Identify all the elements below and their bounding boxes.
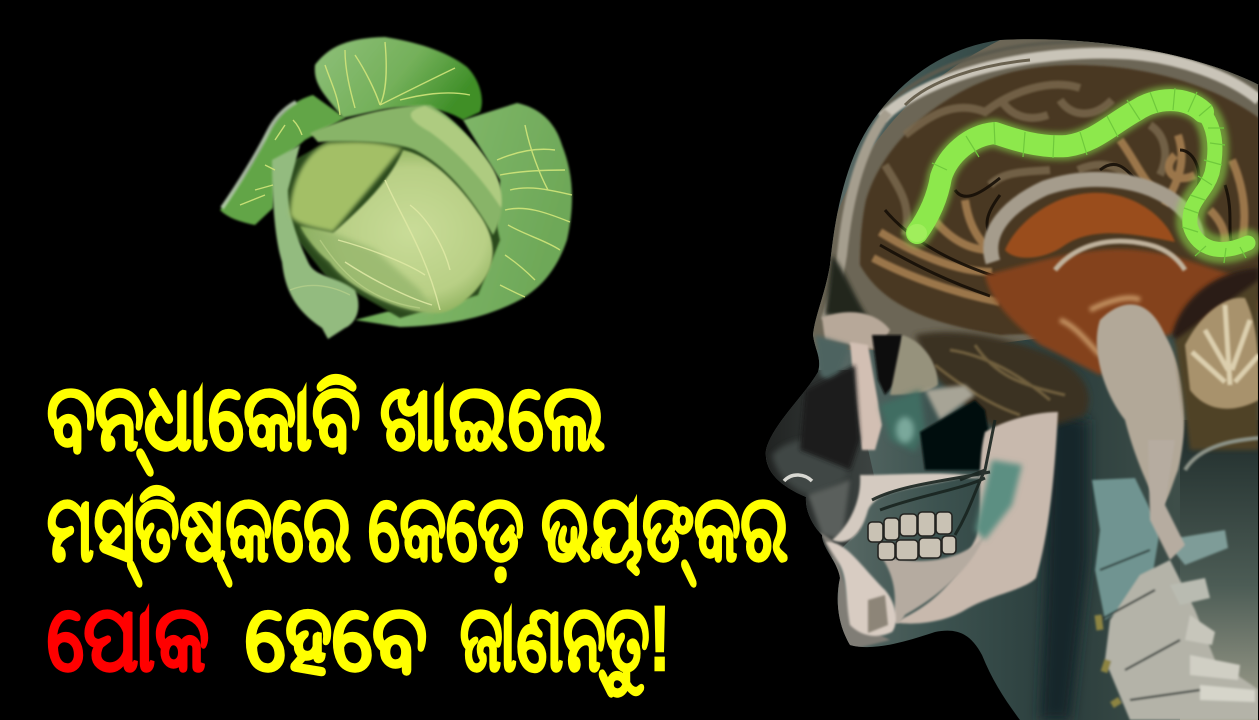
cerebellum [1175, 280, 1259, 450]
front wedge shaded lower-left [300, 226, 435, 313]
brain stem lower pale column [1148, 440, 1185, 560]
teal jaw patch [975, 460, 1022, 540]
spinous process 4 [1190, 655, 1240, 680]
cerebellum surroundings [1175, 280, 1259, 450]
jaw ramus pale [895, 412, 1058, 624]
neck and base tissue [760, 30, 1259, 720]
nose inner lighter patch [772, 439, 850, 498]
headline line 3: yellow word 2: ଜାଣନ୍ତୁ! [460, 588, 670, 698]
skull outer shell [810, 37, 1259, 350]
brain dark sulci [880, 150, 1235, 296]
cerebellum folia [1192, 305, 1259, 385]
lower vertebrae pale [1105, 560, 1259, 720]
cabbage leaf veins [240, 42, 572, 310]
spinous process 5 [1200, 685, 1255, 702]
maxilla pale line [832, 473, 985, 542]
band texture lines [935, 345, 1065, 415]
lower jaw body [880, 535, 985, 623]
brain stem [1097, 304, 1184, 505]
cabbage front wedge [300, 150, 493, 313]
brain upper folds [885, 85, 1165, 235]
dark throat column [1040, 410, 1088, 720]
skull crown pale band [882, 53, 1259, 118]
lower cerebral brown band under callosum [985, 249, 1259, 375]
nose and lip dark profile [760, 370, 875, 560]
worm body tail section [1190, 112, 1248, 250]
maxillary sinus teal patch [880, 390, 925, 452]
upper vertebrae teal [1092, 478, 1160, 620]
cabbage inner left wedge [290, 142, 402, 232]
head x-ray illustration [760, 30, 1259, 720]
glabella teal shadow [815, 335, 850, 385]
brain mass [860, 65, 1259, 335]
mandible front [826, 542, 896, 636]
pale cheek patch [925, 385, 975, 420]
headline line 3: red word: ପୋକ [47, 588, 209, 690]
glowing green worm [907, 88, 1248, 263]
textured dark brain-base band [915, 332, 1089, 440]
headline line 3: yellow word 1: ହେବେ [245, 588, 427, 690]
cervical spine [1092, 478, 1259, 720]
left leaf pale edge [222, 102, 296, 208]
back of neck gradient [1180, 420, 1259, 720]
worm outer glow [917, 100, 1248, 250]
right edge black sliver [1258, 30, 1259, 720]
orange-brown cingulate [1005, 193, 1175, 258]
vertebra dark lines [1100, 550, 1200, 700]
chin cavity [868, 595, 888, 633]
dark mid-face void [920, 400, 990, 470]
worm body front section [917, 100, 1203, 233]
dark region behind brain stem [1172, 268, 1259, 350]
cerebellum body [1185, 298, 1259, 409]
headline line 1: ବନ୍ଧାକୋବି ଖାଇଲେ [47, 367, 605, 476]
worm head tip [907, 224, 927, 242]
diploe streak [905, 60, 1030, 105]
skull edge dark rim [880, 42, 1259, 112]
occipital sweep [1185, 438, 1259, 470]
cabbage top band highlight [411, 106, 502, 208]
thalamus highlights [1060, 298, 1140, 355]
lip soft tissue [820, 532, 890, 650]
nostril highlight [784, 475, 812, 481]
worm segment lines [932, 88, 1246, 263]
brow ridge and forehead base [800, 255, 975, 470]
fornix pale arc [1055, 241, 1185, 270]
yellow disc marks [1098, 615, 1120, 705]
cheek dark upper [800, 365, 860, 470]
brow bone [822, 312, 890, 350]
nasal pale bone [850, 342, 882, 450]
cabbage illustration [220, 37, 572, 339]
spinous process 3 [1185, 615, 1215, 645]
cabbage bottom-left leaf [272, 145, 358, 339]
cabbage dark cavity [282, 130, 500, 318]
dark facial lines [872, 420, 995, 535]
frontal sinus dark patch [825, 255, 870, 320]
corpus callosum arc [991, 179, 1197, 262]
cabbage right outer leaf [355, 103, 572, 327]
orbit dark [872, 335, 905, 395]
title: Odia headline [47, 367, 788, 698]
cabbage top leaf [315, 37, 482, 120]
teeth [868, 512, 956, 560]
skull inner pale band left [826, 112, 888, 320]
orbit lateral pale wall [890, 335, 938, 395]
headline line 2: ମସ୍ତିଷ୍କରେ କେଡ଼େ ଭୟଙ୍କର [47, 478, 788, 587]
spinous process 2 [1170, 578, 1210, 605]
cabbage overlapping band leaf [310, 105, 502, 235]
brain lower frontal folds [873, 135, 1244, 302]
spinous process 1 [1165, 530, 1228, 565]
sinus highlight [896, 417, 914, 443]
cabbage left outer leaf [220, 95, 345, 225]
cheek below nose [808, 480, 850, 540]
